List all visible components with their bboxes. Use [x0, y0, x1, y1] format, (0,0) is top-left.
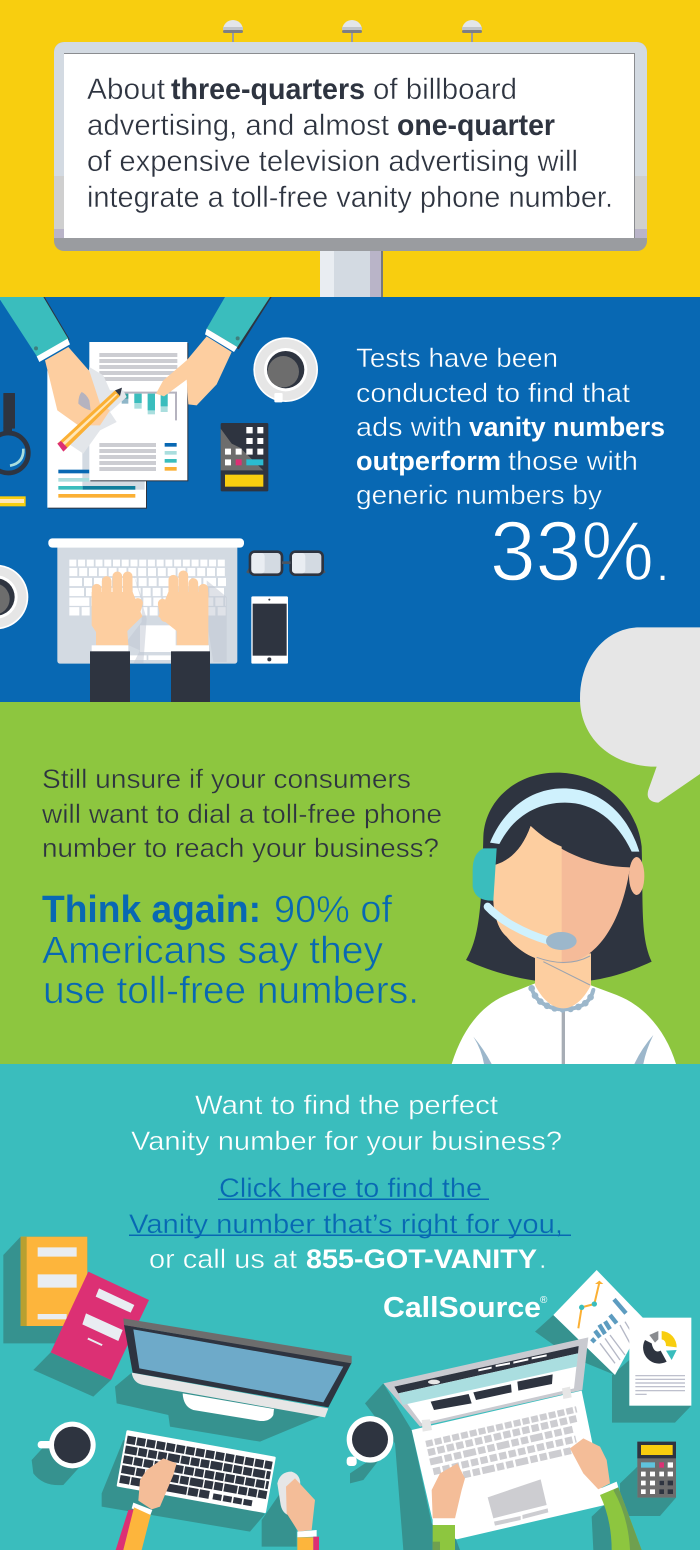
icon: report sheet with donut [629, 1318, 691, 1406]
icon: speech bubble [580, 627, 700, 803]
tests statement text: generic numbers by [356, 480, 603, 510]
icon: agent face [493, 826, 644, 985]
icon: back paper [47, 370, 147, 509]
think again statistic text: Think again: [42, 889, 261, 931]
tests statement text: Tests have been [356, 343, 558, 373]
icon: calculator [637, 1442, 676, 1498]
icon: left hand and sleeve [432, 1463, 465, 1550]
icon: agent body [452, 983, 676, 1064]
think again statistic text [42, 889, 419, 1012]
icon: partial coffee cup [0, 565, 28, 629]
tests statement text: vanity numbers [469, 412, 665, 442]
icon: desk calculator [221, 423, 268, 491]
call to action text: Vanity number for your business? [131, 1126, 562, 1156]
icon: headset [473, 788, 639, 950]
call to action text: 855-GOT-VANITY [306, 1244, 537, 1274]
icon: pink notebook [51, 1272, 149, 1380]
icon: orange book [21, 1237, 87, 1326]
link text: Vanity number that’s right for you, [129, 1209, 563, 1239]
icon: left sleeve and hand [0, 297, 110, 425]
icon: laptop [383, 1337, 605, 1539]
panel: toll-free usage section [0, 627, 700, 1064]
icon: chart sheet [553, 1270, 645, 1375]
statistic: 33%: . [657, 545, 668, 589]
icon: billboard lamps [223, 20, 482, 43]
think again statistic text: use toll-free numbers. [43, 970, 419, 1012]
icon: headphones [0, 393, 28, 473]
icon: mug [347, 1416, 393, 1466]
icon: coffee cup [253, 337, 318, 402]
billboard text: of expensive television advertising will [87, 145, 578, 178]
icon: glasses [247, 552, 325, 575]
question text: Still unsure if your consumers [42, 764, 411, 794]
panel: call to action section [0, 1064, 700, 1550]
illustration: desk with papers and laptop [0, 297, 325, 702]
billboard text: one-quarter [397, 109, 555, 142]
icon: desktop monitor [123, 1318, 352, 1421]
icon: typing hand [116, 1458, 177, 1550]
panel: billboard section [0, 0, 700, 297]
hand shadow on paper [68, 367, 127, 454]
think again statistic text: 90% of [274, 889, 392, 931]
icon: billboard pole [320, 250, 383, 297]
logo: CallSource: ® [540, 1295, 548, 1306]
link text: Click here to find the [219, 1173, 482, 1203]
illustration: right desk with laptop [347, 1270, 691, 1550]
tests statement text: those with [508, 446, 638, 476]
billboard frame [54, 42, 647, 251]
tests statement text: conducted to find that [356, 378, 631, 408]
link text [129, 1173, 571, 1239]
icon: mouse with hand [277, 1472, 319, 1550]
panel: vanity number tests section [0, 297, 700, 702]
tests statement text [356, 343, 665, 510]
long shadows [350, 1315, 691, 1550]
icon: agent hair [466, 773, 652, 981]
question text: number to reach your business? [42, 833, 439, 863]
icon: pencil [57, 388, 122, 452]
illustration: left desk with monitor [3, 1237, 352, 1550]
long shadows [3, 1237, 328, 1547]
question text: will want to dial a toll-free phone [41, 799, 442, 829]
call to action text: . [539, 1244, 547, 1274]
icon: front paper with chart [89, 342, 188, 481]
icon: marker stub [0, 496, 26, 506]
tests statement text: ads with [356, 412, 462, 442]
icon: coffee mug [38, 1422, 96, 1468]
statistic: 33%: 33% [490, 504, 654, 598]
call to action text: Want to find the perfect [195, 1090, 499, 1120]
icon: smartphone [251, 596, 288, 664]
billboard text [87, 73, 613, 214]
icon: right hand and sleeve [570, 1438, 642, 1550]
icon: laptop [48, 538, 244, 664]
tests statement text: outperform [356, 446, 501, 476]
icon: right sleeve and hand [156, 297, 272, 405]
call to action text: or call us at [149, 1244, 298, 1274]
billboard text: integrate a toll-free vanity phone number. [87, 181, 613, 214]
question text [41, 764, 442, 863]
call to action text [131, 1090, 562, 1274]
billboard text: three-quarters [171, 73, 365, 106]
logo: CallSource: CallSource [383, 1292, 541, 1324]
billboard text: About [87, 73, 165, 106]
billboard text: of billboard [373, 73, 517, 106]
illustration: call centre agent with speech bubble [452, 627, 700, 1064]
billboard text: advertising, and almost [87, 109, 389, 142]
icon: agent neck [535, 953, 591, 1008]
think again statistic text: Americans say they [42, 930, 383, 972]
icon: typing hands and sleeves [90, 575, 210, 702]
icon: keyboard [117, 1430, 276, 1513]
